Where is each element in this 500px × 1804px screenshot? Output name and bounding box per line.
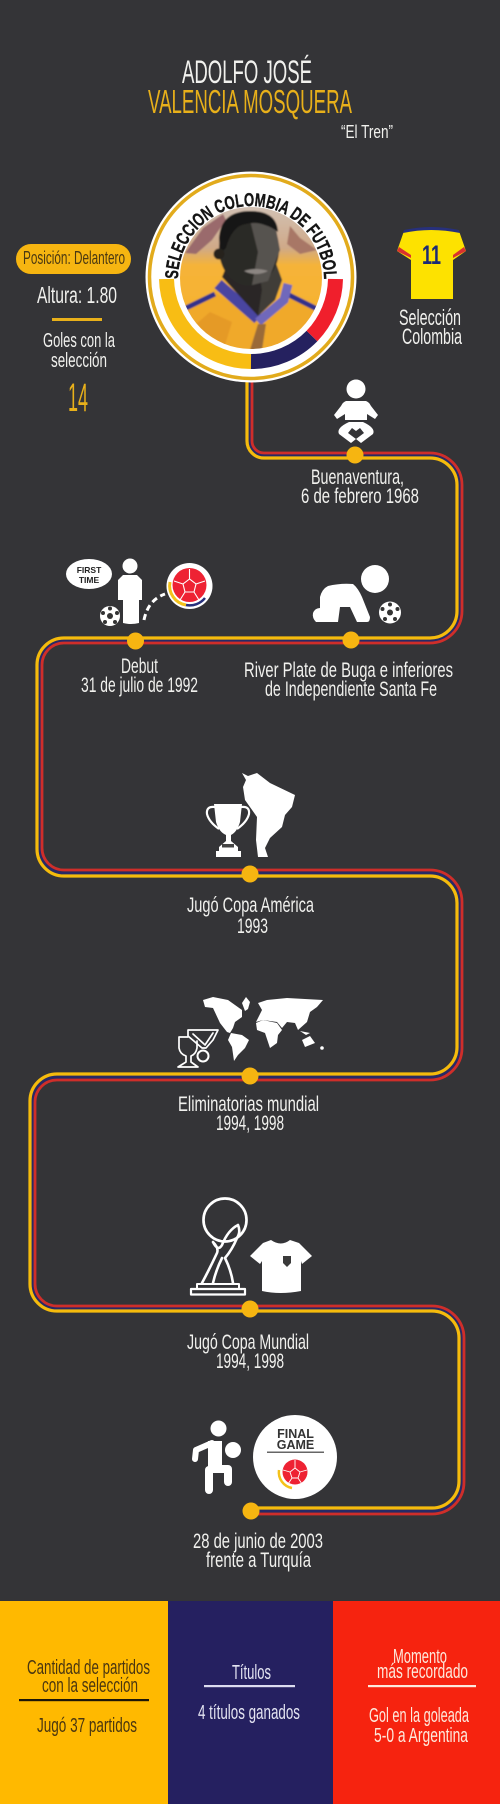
icon: medal and cup	[178, 1030, 218, 1067]
text: youth clubs	[244, 659, 453, 701]
icon: world cup trophy outline	[191, 1198, 246, 1294]
panel: matches: Jugó 37 partidos	[37, 1715, 137, 1737]
icon: final game badge: GAME	[277, 1438, 314, 1452]
icon: trophy	[207, 804, 249, 857]
goals stat: 14	[68, 376, 88, 420]
height stat: Altura: 1.80	[37, 282, 117, 308]
panel: best moment	[333, 1601, 500, 1804]
goals stat: Goles con la	[43, 330, 116, 352]
text: qualifiers: Eliminatorias mundial	[178, 1093, 319, 1116]
player portrait	[180, 207, 322, 349]
icon: final game badge	[253, 1415, 337, 1499]
icon: player kicking ball	[195, 1420, 241, 1490]
icon: crawling baby with ball	[313, 565, 401, 624]
text: world cup: Jugó Copa Mundial	[187, 1331, 309, 1354]
badge arc: navy	[251, 336, 312, 362]
text: birth: Buenaventura,	[311, 466, 404, 489]
timeline markers	[127, 446, 364, 1520]
person	[118, 558, 142, 624]
speech bubble: TIME	[79, 575, 99, 585]
icon: final game badge: FINAL	[277, 1427, 314, 1441]
panel: matches	[0, 1601, 168, 1804]
panel: titles: 4 títulos ganados	[198, 1702, 300, 1724]
goals stat	[43, 318, 116, 420]
text: debut: Debut	[121, 655, 158, 678]
text: last match	[193, 1530, 323, 1572]
icon: baby	[334, 380, 378, 443]
text: copa america: Jugó Copa América	[187, 894, 314, 917]
crest	[279, 1460, 308, 1488]
panel: best moment: Momento	[393, 1646, 447, 1668]
colombia crest	[166, 563, 212, 609]
panel: titles	[168, 1601, 333, 1804]
text: world cup: 1994, 1998	[216, 1350, 284, 1373]
text: Selección Colombia: Selección	[399, 305, 461, 330]
text: Selección Colombia: Colombia	[402, 324, 462, 349]
title: ADOLFO JOSÉ	[182, 54, 312, 90]
text: world cup	[187, 1331, 309, 1373]
panel: matches: con la selección	[42, 1675, 138, 1697]
icon: south america	[242, 773, 295, 857]
icon: yellow jersey number 11: 11	[422, 240, 441, 270]
icon: yellow jersey number 11	[397, 227, 466, 299]
text: copa america: 1993	[237, 915, 268, 938]
panel: matches: Cantidad de partidos	[27, 1657, 150, 1679]
title	[148, 54, 352, 120]
football	[100, 606, 120, 626]
badge arc: red	[312, 279, 336, 336]
dashed trail	[144, 594, 165, 620]
text: Selección Colombia	[399, 305, 462, 349]
panel: titles: Títulos	[232, 1662, 271, 1684]
icon: white t-shirt	[250, 1240, 312, 1293]
player badge	[146, 172, 356, 382]
title: VALENCIA MOSQUERA	[148, 83, 352, 120]
text: qualifiers: 1994, 1998	[216, 1112, 284, 1135]
timeline path	[30, 381, 464, 1514]
text: copa america	[187, 894, 314, 938]
badge arc: yellow	[166, 279, 251, 362]
nickname: “El Tren”	[341, 122, 393, 142]
speech bubble: FIRST	[77, 565, 102, 575]
position pill	[16, 244, 131, 274]
icon: first time debut	[66, 558, 212, 626]
text: debut: 31 de julio de 1992	[81, 674, 198, 697]
position pill: Posición: Delantero	[23, 248, 125, 268]
text: birth	[301, 466, 419, 508]
goals stat: selección	[51, 350, 107, 372]
text: last match: 28 de junio de 2003	[193, 1530, 323, 1553]
text: birth: 6 de febrero 1968	[301, 485, 419, 508]
text: qualifiers	[178, 1093, 319, 1135]
text: debut	[81, 655, 198, 697]
badge lettering: SELECCION COLOMBIA DE FUTBOL	[165, 192, 337, 279]
text: last match: frente a Turquía	[206, 1549, 311, 1572]
speech bubble	[66, 559, 112, 589]
icon: world map	[203, 997, 324, 1061]
